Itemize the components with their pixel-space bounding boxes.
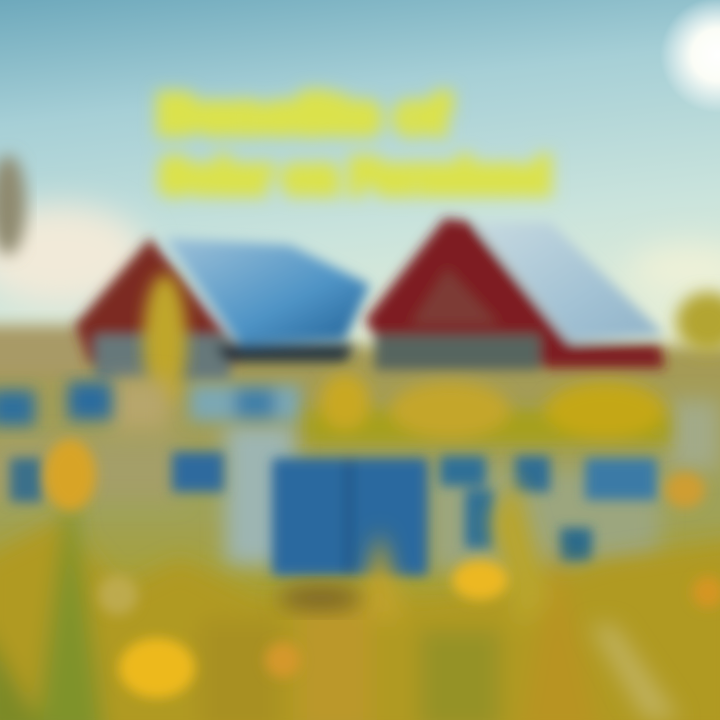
foreground grass [0, 470, 720, 720]
solar panel row: upper [0, 382, 300, 426]
right barn gable inner wall [410, 268, 500, 325]
flower: pale left [98, 575, 138, 615]
barn: left building [75, 238, 370, 380]
flower: far right [692, 576, 720, 608]
flower: large bottom left [119, 638, 195, 698]
pale grass blade at lower right [590, 625, 680, 720]
left barn solar roof [165, 238, 370, 345]
flower: centre right [452, 560, 508, 600]
flower: small bottom centre [265, 642, 301, 678]
title line 1: Benefits of [158, 86, 449, 144]
flower: right [665, 472, 705, 508]
tall yellow plant in front of barn [143, 274, 187, 406]
ground field [0, 345, 720, 720]
distant tree at left [0, 155, 26, 255]
left barn lower wall [95, 335, 230, 380]
yellow flowers [44, 439, 720, 698]
flower: upper left [44, 439, 96, 511]
left horizon band [0, 325, 90, 375]
left barn eave shadow [215, 345, 355, 362]
solar panel row: lower [10, 452, 657, 576]
dark shadow under panels [278, 586, 362, 610]
right barn lower wall [375, 335, 540, 370]
right barn solar roof [475, 222, 665, 342]
title line 2: Solar on Farmland [160, 150, 550, 202]
mottled tan and pale patches of mid field [0, 380, 720, 570]
distant tree at right [676, 292, 720, 352]
left barn gable [75, 238, 235, 365]
right barn gable [365, 218, 665, 368]
sky background [0, 0, 720, 400]
barn: right building [365, 218, 665, 370]
clouds on the horizon [0, 205, 720, 305]
sun [660, 0, 720, 113]
title [158, 86, 550, 202]
yellow flower band across panels [305, 374, 670, 444]
